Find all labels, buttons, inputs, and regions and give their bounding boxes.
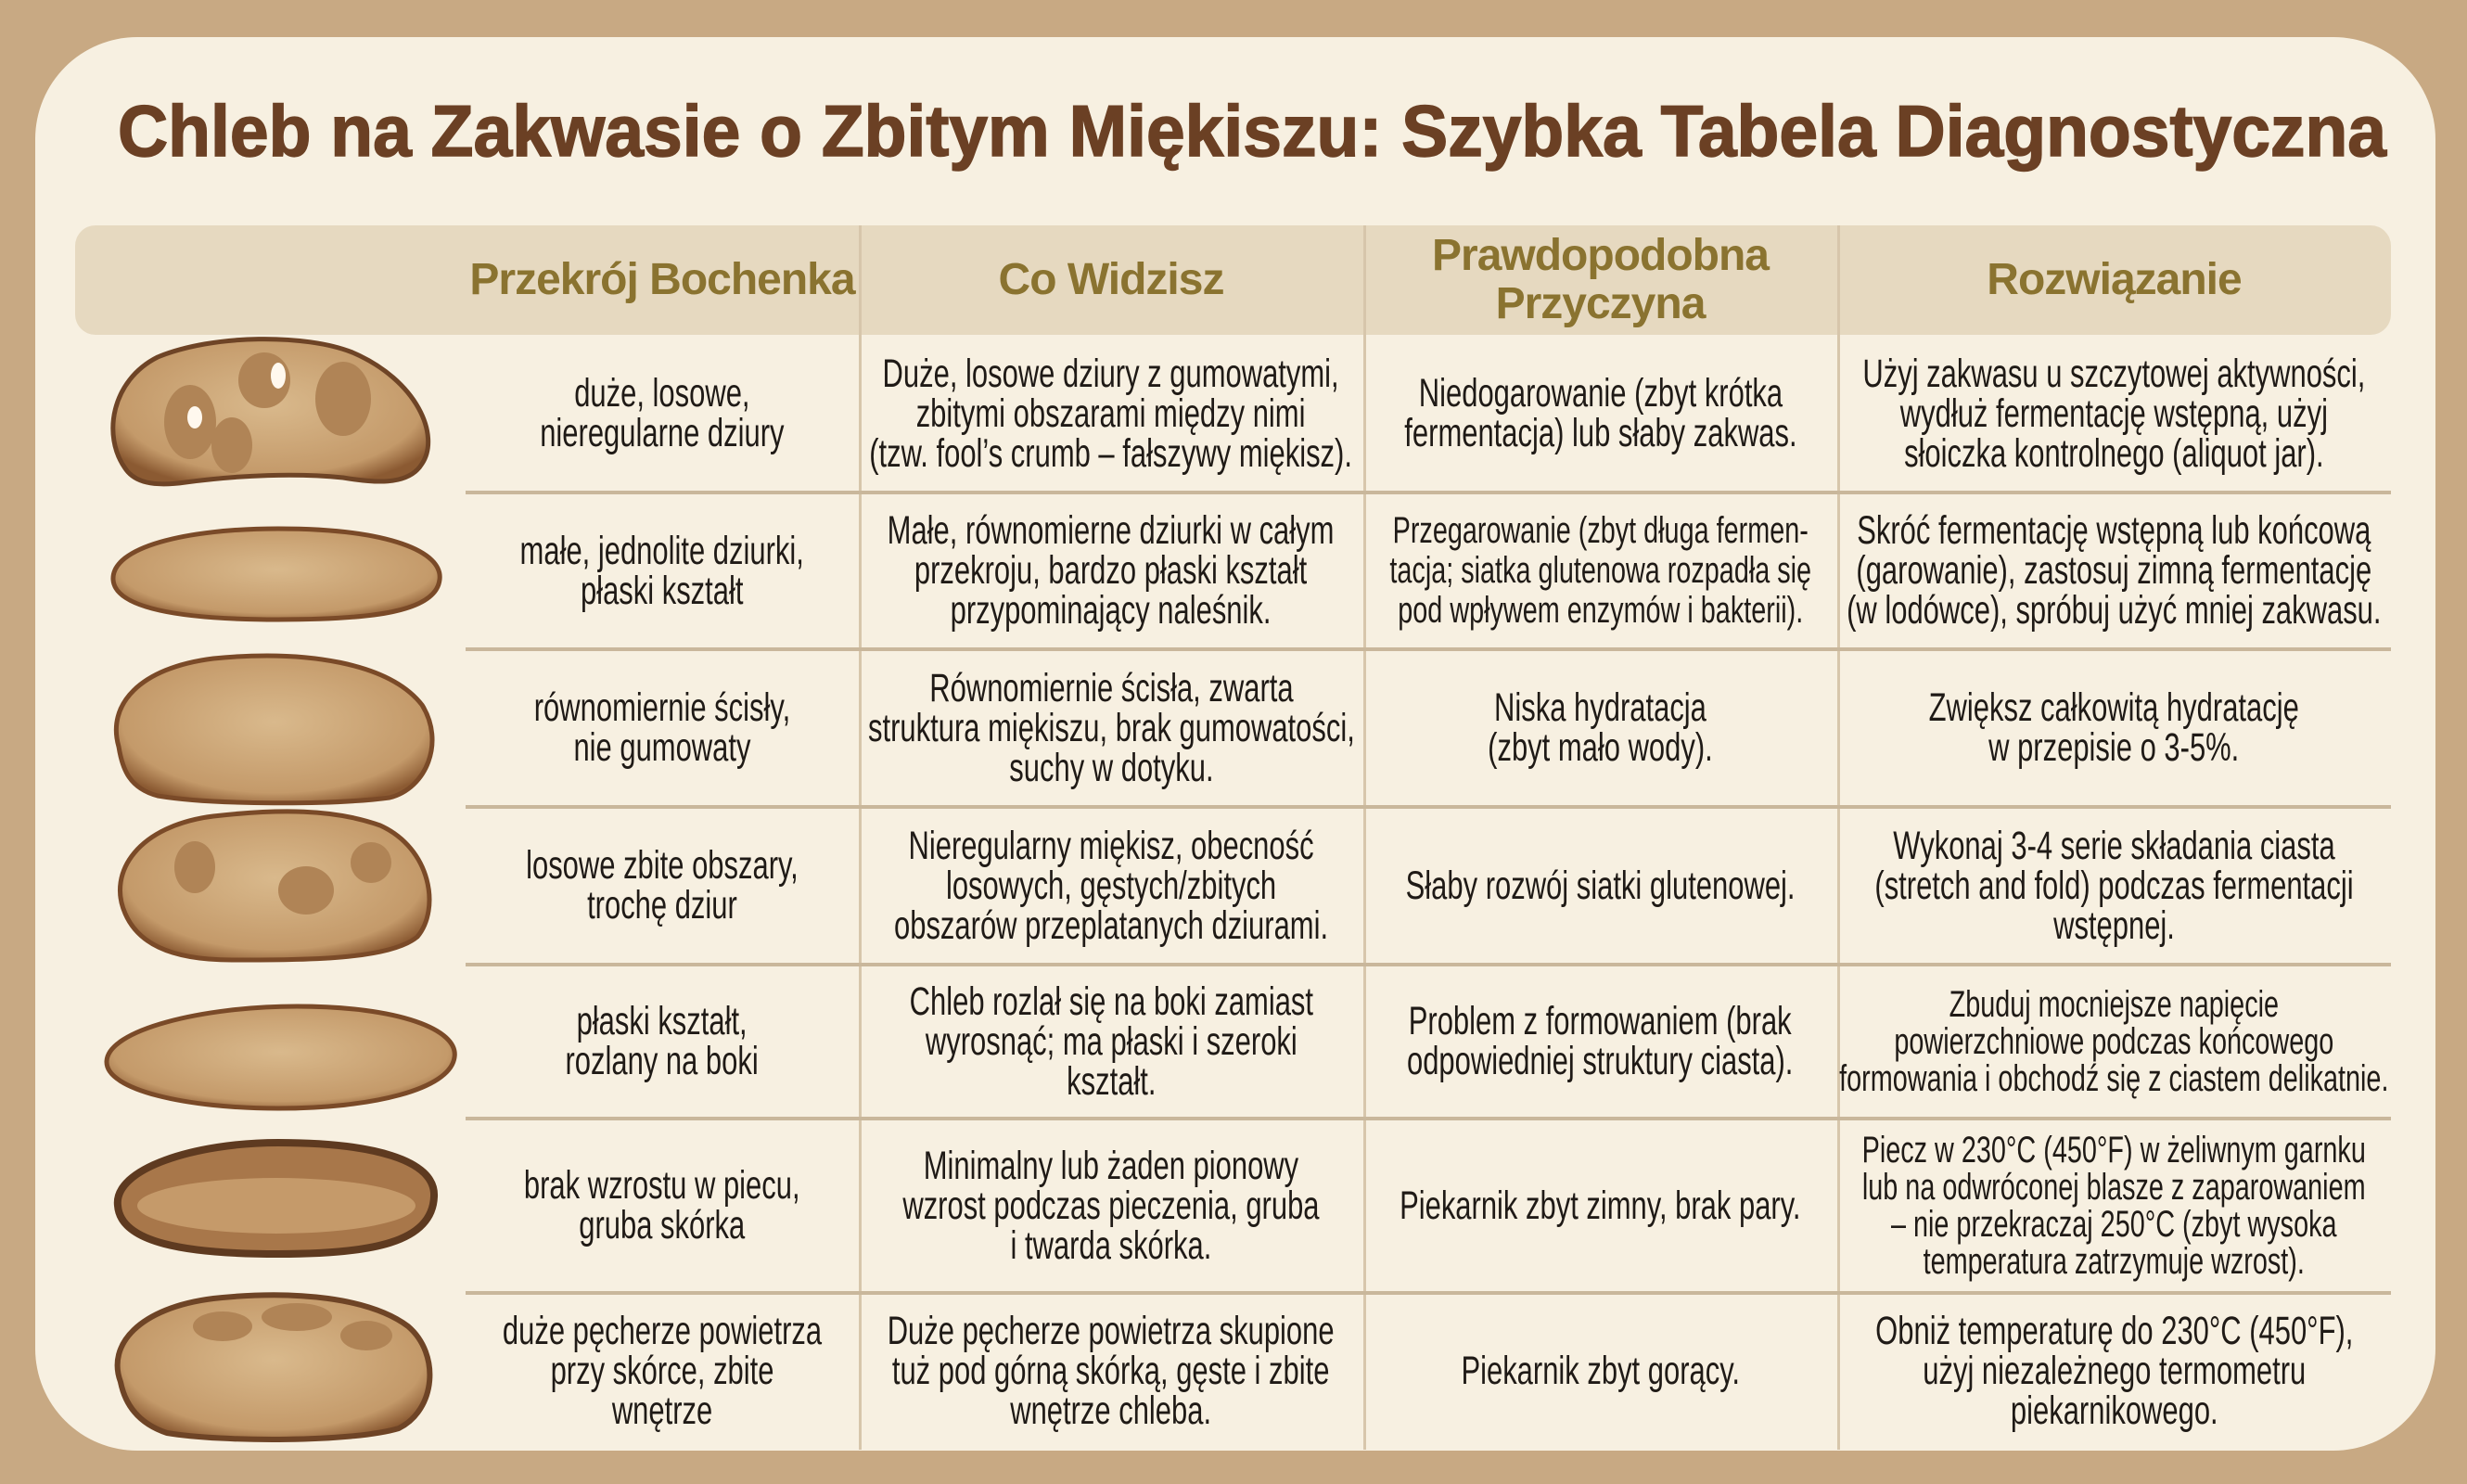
text: płaski kształt, bbox=[577, 999, 748, 1043]
text: małe, jednolite dziurki, bbox=[520, 529, 804, 573]
text: Piekarnik zbyt zimny, brak pary. bbox=[1400, 1183, 1801, 1228]
header: Przekrój Bochenka: Przekrój Bochenka bbox=[469, 255, 855, 304]
text: nie gumowaty bbox=[573, 725, 750, 770]
text: brak wzrostu w piecu, bbox=[524, 1163, 800, 1208]
text: wnętrze bbox=[612, 1388, 712, 1432]
header: Rozwiązanie: Rozwiązanie bbox=[1987, 255, 2242, 304]
text: suchy w dotyku. bbox=[1009, 746, 1213, 790]
text: przy skórce, zbite bbox=[551, 1349, 773, 1393]
icon: bread 2 bbox=[113, 529, 440, 620]
icon: bread 5 bbox=[107, 1006, 454, 1108]
text: równomiernie ścisły, bbox=[534, 685, 790, 730]
text: formowania i obchodź się z ciastem delikatnie. bbox=[1839, 1058, 2389, 1099]
row 1 bbox=[540, 351, 2365, 475]
text: duże pęcherze powietrza bbox=[503, 1308, 822, 1352]
header band bbox=[75, 225, 2391, 335]
text: (stretch and fold) podczas fermentacji bbox=[1874, 863, 2354, 907]
text: wstępnej. bbox=[2053, 903, 2175, 948]
text: Zwiększ całkowitą hydratację bbox=[1929, 685, 2299, 730]
header: Prawdopodobna Przyczyna: Przyczyna bbox=[1496, 279, 1705, 328]
text: płaski kształt bbox=[581, 568, 744, 612]
text: przypominający naleśnik. bbox=[951, 588, 1272, 633]
row 2 bbox=[520, 508, 2382, 633]
text: użyj niezależnego termometru bbox=[1923, 1349, 2306, 1393]
text: tacja; siatka glutenowa rozpadła się bbox=[1389, 550, 1811, 591]
icon: bread 4 bbox=[120, 812, 429, 960]
text: pod wpływem enzymów i bakterii). bbox=[1398, 590, 1803, 631]
bread illustrations bbox=[104, 337, 457, 1442]
text: w przepisie o 3-5%. bbox=[1988, 725, 2240, 770]
text: Minimalny lub żaden pionowy bbox=[924, 1143, 1298, 1187]
text: trochę dziur bbox=[587, 883, 737, 928]
text: tuż pod górną skórką, gęste i zbite bbox=[892, 1349, 1330, 1393]
text: wnętrze chleba. bbox=[1011, 1388, 1211, 1432]
header: Prawdopodobna Przyczyna bbox=[1432, 231, 1770, 328]
text: Problem z formowaniem (brak bbox=[1409, 999, 1792, 1043]
icon: bread 7 bbox=[118, 1295, 429, 1439]
text: gruba skórka bbox=[580, 1203, 745, 1247]
text: wyrosnąć; ma płaski i szeroki bbox=[926, 1018, 1297, 1063]
row 3 bbox=[534, 666, 2299, 790]
icon: bread 6 bbox=[118, 1143, 434, 1254]
text: Niedogarowanie (zbyt krótka bbox=[1418, 371, 1783, 416]
text: Małe, równomierne dziurki w całym bbox=[888, 508, 1335, 553]
text: wzrost podczas pieczenia, gruba bbox=[902, 1183, 1320, 1228]
text: (zbyt mało wody). bbox=[1488, 725, 1713, 770]
text: Piekarnik zbyt gorący. bbox=[1461, 1349, 1740, 1393]
header: Co Widzisz: Co Widzisz bbox=[999, 255, 1223, 304]
text: odpowiedniej struktury ciasta). bbox=[1407, 1039, 1794, 1083]
text: kształt. bbox=[1067, 1059, 1156, 1104]
row 4 bbox=[526, 824, 2354, 948]
text: i twarda skórka. bbox=[1011, 1222, 1211, 1267]
text: (w lodówce), spróbuj użyć mniej zakwasu. bbox=[1847, 588, 2382, 633]
text: temperatura zatrzymuje wzrost). bbox=[1924, 1241, 2305, 1282]
text: wydłuż fermentację wstępną, użyj bbox=[1900, 391, 2328, 436]
text: Użyj zakwasu u szczytowej aktywności, bbox=[1863, 351, 2365, 395]
text: Piecz w 230°C (450°F) w żeliwnym garnku bbox=[1862, 1130, 2366, 1171]
text: Niska hydratacja bbox=[1494, 685, 1706, 730]
text: rozlany na boki bbox=[566, 1039, 759, 1083]
text: Chleb rozlał się na boki zamiast bbox=[909, 979, 1313, 1024]
header: Prawdopodobna Przyczyna: Prawdopodobna bbox=[1432, 231, 1769, 280]
text: fermentacja) lub słaby zakwas. bbox=[1404, 411, 1796, 455]
row 5 bbox=[566, 979, 2389, 1104]
text: Duże pęcherze powietrza skupione bbox=[888, 1308, 1335, 1352]
text: zbitymi obszarami między nimi bbox=[916, 391, 1306, 436]
text: Duże, losowe dziury z gumowatymi, bbox=[883, 351, 1339, 395]
text: (garowanie), zastosuj zimną fermentację bbox=[1857, 548, 2371, 593]
text: piekarnikowego. bbox=[2011, 1388, 2218, 1432]
row 7 bbox=[503, 1308, 2353, 1432]
text: powierzchniowe podczas końcowego bbox=[1895, 1021, 2333, 1062]
text: duże, losowe, bbox=[574, 371, 750, 416]
text: Równomiernie ścisła, zwarta bbox=[929, 666, 1293, 710]
text: przekroju, bardzo płaski kształt bbox=[914, 548, 1308, 593]
icon: bread 3 bbox=[116, 656, 432, 803]
text: słoiczka kontrolnego (aliquot jar). bbox=[1904, 430, 2324, 475]
text: Wykonaj 3-4 serie składania ciasta bbox=[1893, 824, 2335, 868]
text: losowych, gęstych/zbitych bbox=[946, 863, 1276, 907]
text: obszarów przeplatanych dziurami. bbox=[894, 903, 1328, 948]
text: Słaby rozwój siatki glutenowej. bbox=[1406, 863, 1795, 907]
text: – nie przekraczaj 250°C (zbyt wysoka bbox=[1891, 1204, 2337, 1245]
text: nieregularne dziury bbox=[540, 411, 785, 455]
text: lub na odwróconej blasze z zaparowaniem bbox=[1862, 1167, 2366, 1208]
text: Obniż temperaturę do 230°C (450°F), bbox=[1875, 1308, 2353, 1352]
text: losowe zbite obszary, bbox=[526, 843, 799, 888]
text: struktura miękiszu, brak gumowatości, bbox=[868, 705, 1354, 749]
text: Zbuduj mocniejsze napięcie bbox=[1949, 984, 2279, 1025]
title: Chleb na Zakwasie o Zbitym Miękiszu: Szybka Tabela Diagnostyczna bbox=[118, 90, 2387, 172]
text: (tzw. fool’s crumb – fałszywy miękisz). bbox=[870, 430, 1352, 475]
text: Skróć fermentację wstępną lub końcową bbox=[1857, 508, 2371, 553]
text: Nieregularny miękisz, obecność bbox=[908, 824, 1314, 868]
row 6 bbox=[524, 1130, 2366, 1282]
text: Przegarowanie (zbyt długa fermen- bbox=[1392, 510, 1809, 551]
icon: bread 1 bbox=[113, 339, 428, 484]
